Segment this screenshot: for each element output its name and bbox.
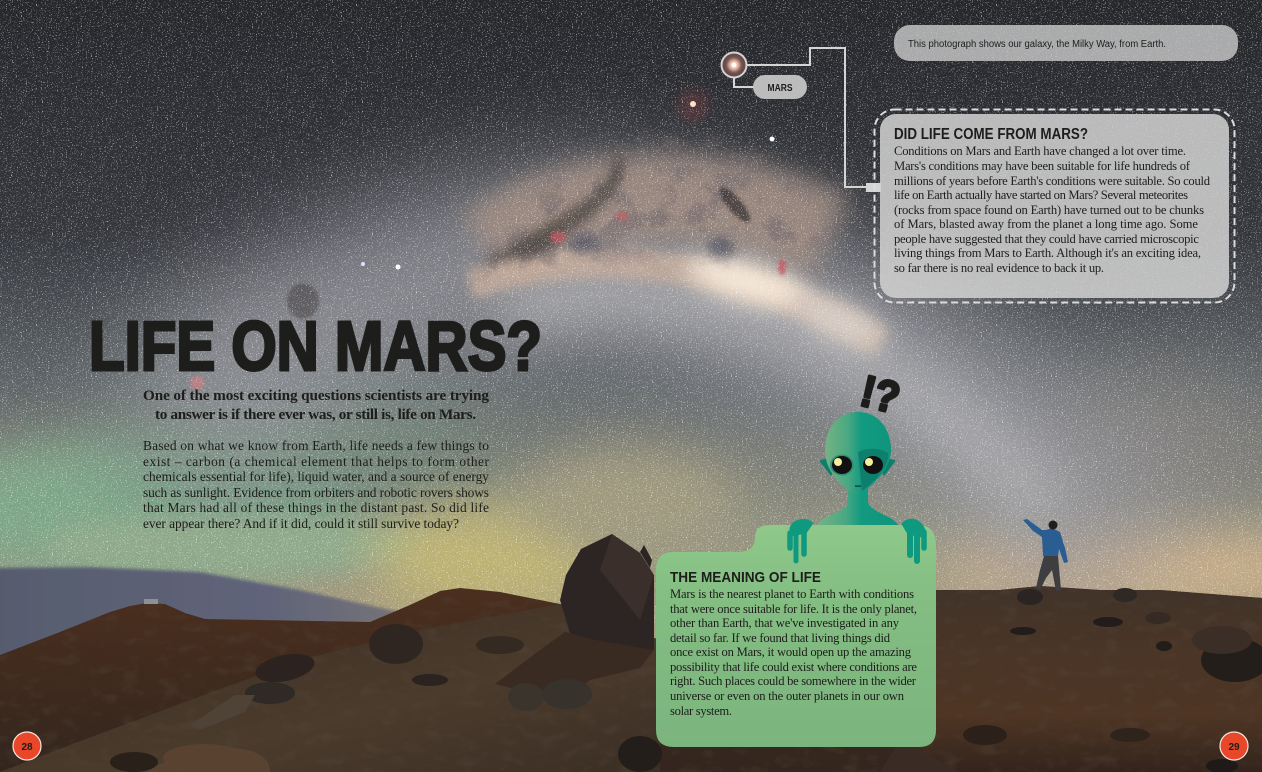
body text: such as sunlight. Evidence from orbiters and robotic rovers shows — [143, 485, 489, 500]
text block: did life come from Mars: millions of years before Earth's conditions were suitable. So could — [894, 174, 1211, 188]
photo caption — [894, 25, 1238, 61]
far telescopes — [144, 599, 158, 604]
text block: the meaning of life: universe or even on the outer planets in our own — [670, 689, 905, 703]
text block: did life come from Mars — [894, 144, 1211, 275]
intro text: to answer is if there ever was, or still is, life on Mars. — [155, 406, 476, 423]
text block: the meaning of life: right. Such places could be somewhere in the wider — [670, 674, 917, 688]
alien ears — [821, 460, 894, 474]
body text: that Mars had all of these things in the distant past. So did life — [143, 500, 489, 515]
text block: the meaning of life: possibility that life could exist where conditions are — [670, 660, 917, 674]
text block: did life come from Mars: life on Earth actually have started on Mars? Several meteorites — [894, 188, 1188, 202]
text block: did life come from Mars: Mars's conditions may have been suitable for life hundreds of — [894, 159, 1191, 173]
intro text — [143, 387, 489, 423]
alien left hand — [790, 519, 813, 561]
text block: the meaning of life — [670, 587, 917, 718]
text block: did life come from Mars: Conditions on Mars and Earth have changed a lot over time. — [894, 144, 1186, 158]
label: Mars — [753, 75, 807, 99]
body text: Based on what we know from Earth, life needs a few things to — [143, 438, 489, 453]
body text: ever appear there? And if it did, could it still survive today? — [143, 516, 459, 531]
body text: exist – carbon (a chemical element that helps to form other — [143, 454, 490, 469]
page number 29 — [1220, 732, 1248, 760]
photo: person pointing at the sky — [1023, 519, 1068, 591]
alien face shadow — [858, 449, 888, 491]
page number 28 — [13, 732, 41, 760]
alien character — [817, 367, 905, 525]
label: Mars: MARS — [768, 83, 793, 94]
alien body — [817, 485, 898, 525]
body text — [143, 438, 490, 531]
text block: did life come from Mars: of Mars, blasted away from the planet a long time ago. Some — [894, 217, 1198, 231]
text block: did life come from Mars: living things from Mars to Earth. Although it's an exciting idea, — [894, 246, 1201, 260]
photo foreground: mountains and rocky ground — [0, 534, 1262, 772]
rock pile — [560, 534, 654, 650]
callout line linking Mars to the info box — [734, 48, 881, 192]
page number 29: 29 — [1228, 742, 1240, 753]
text block: the meaning of life: Mars is the nearest planet to Earth with conditions — [670, 587, 914, 601]
page number 28: 28 — [21, 742, 33, 753]
text block: did life come from Mars: so far there is no real evidence to back it up. — [894, 261, 1104, 275]
text block: the meaning of life: detail so far. If we found that living things did — [670, 631, 891, 645]
text block: the meaning of life: once exist on Mars, it would open up the amazing — [670, 645, 912, 659]
heading: the meaning of life: THE MEANING OF LIFE — [670, 570, 821, 586]
body text: chemicals essential for life), liquid water, and a source of energy — [143, 469, 489, 484]
alien head — [825, 412, 891, 494]
text block: did life come from Mars: (rocks from space found on Earth) have turned out to be chunks — [894, 203, 1204, 217]
intro text: One of the most exciting questions scientists are trying — [143, 387, 489, 404]
text block: the meaning of life: solar system. — [670, 704, 732, 718]
photo caption: This photograph shows our galaxy, the Milky Way, from Earth. — [908, 39, 1166, 50]
marker ring around Mars — [722, 52, 746, 78]
alien eyes — [830, 454, 883, 476]
icon: exclamation and question marks: !? — [856, 367, 905, 423]
panel: the meaning of life — [656, 525, 936, 747]
text block: the meaning of life: that were once suitable for life. It is the only planet, — [670, 602, 917, 616]
title: LIFE ON MARS? — [89, 307, 542, 385]
heading: did life come from Mars: DID LIFE COME FROM MARS? — [894, 126, 1088, 143]
text block: did life come from Mars: people have suggested that they could have carried microscopic — [894, 232, 1199, 246]
text block: the meaning of life: other than Earth, that we've investigated in any — [670, 616, 900, 630]
alien mouth — [855, 486, 861, 487]
panel: did life come from Mars — [874, 110, 1234, 302]
alien right hand — [902, 519, 925, 561]
